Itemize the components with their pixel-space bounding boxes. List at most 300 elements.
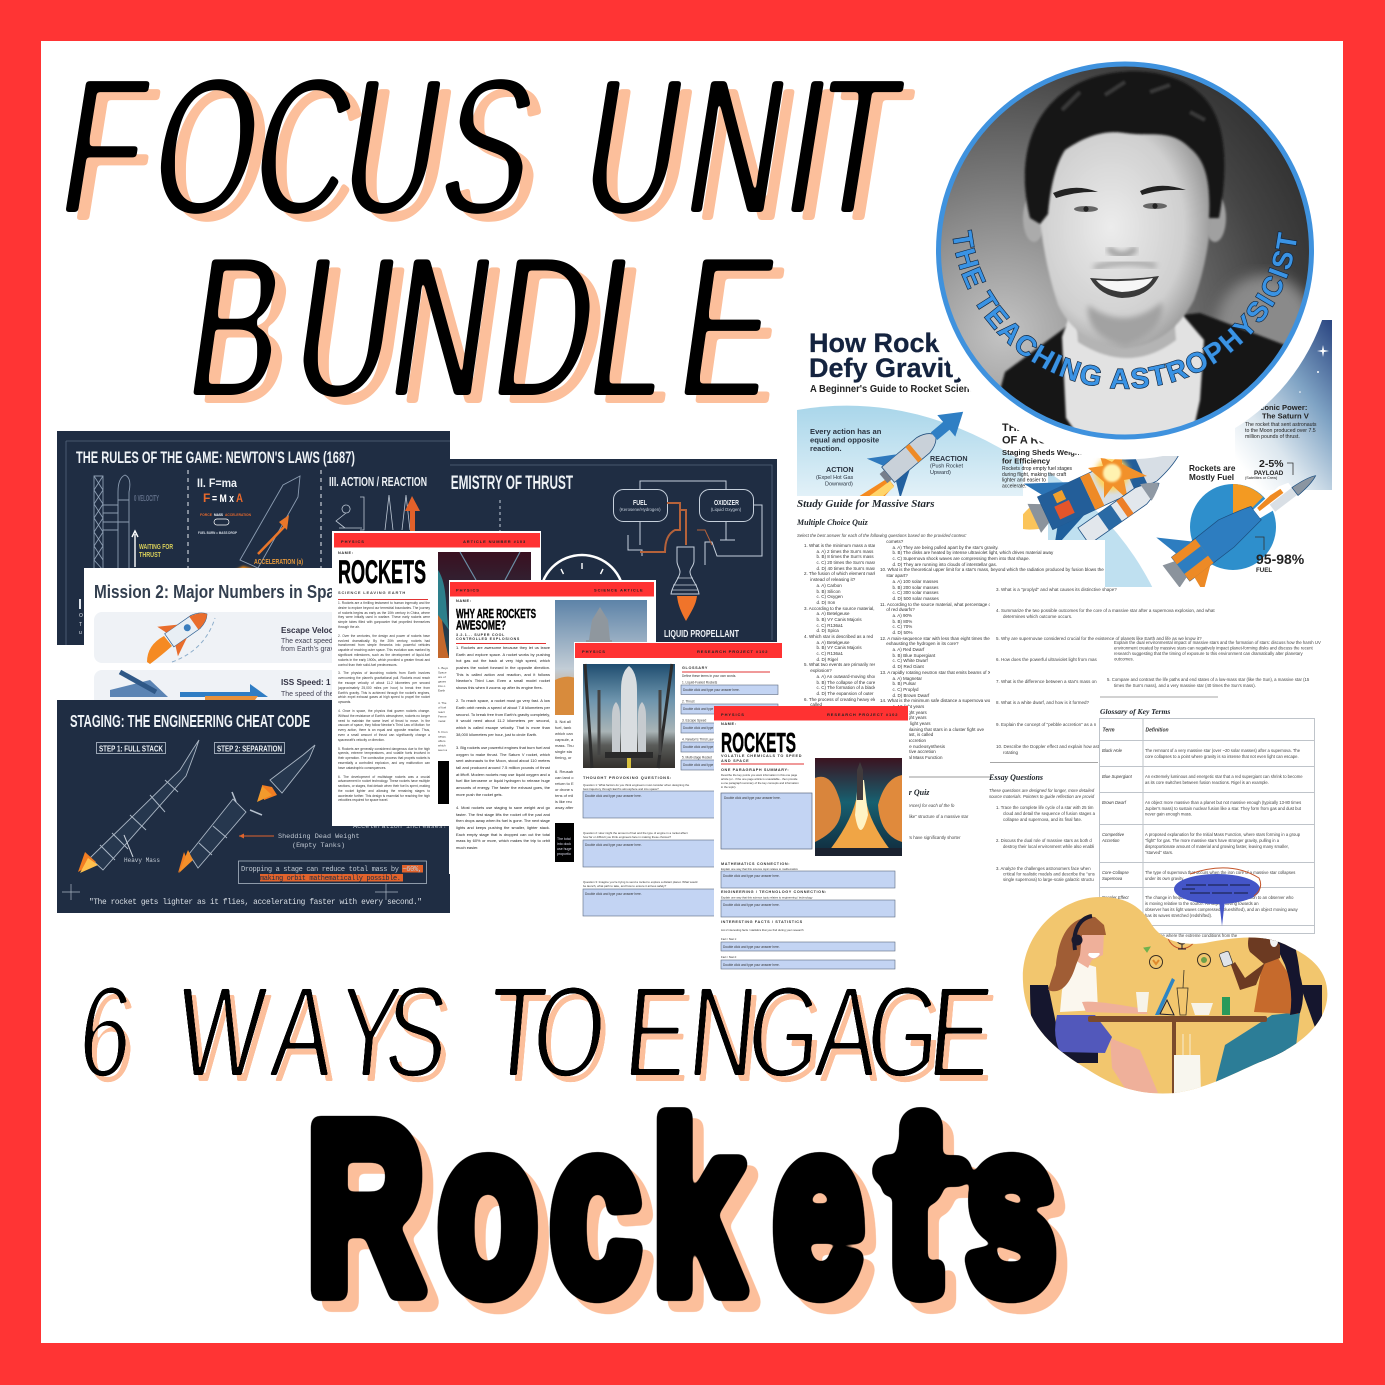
doc page: study guide quiz: Why do massive stars have significantly shorter <box>870 835 961 840</box>
thought provoking questions: be launch, what path to take, and how to ensure it arrives safely? <box>583 884 667 888</box>
fuel pie chart: Rockets are <box>1189 464 1236 473</box>
waiting for thrust: THRUST <box>139 550 161 559</box>
side text: gases <box>438 680 447 684</box>
side text: away after <box>555 805 574 810</box>
side text: Earth <box>438 688 446 692</box>
heavy mass label <box>124 835 160 864</box>
glossary answer boxes: 4. Newton's Third Law <box>682 738 714 742</box>
full stack rocket <box>78 740 199 873</box>
law two: FUEL BURN = MASS DROP <box>198 531 237 535</box>
waiting for thrust <box>132 531 173 567</box>
black fact box <box>555 823 575 862</box>
portrait photo <box>935 60 1315 445</box>
action-reaction text <box>810 427 968 488</box>
glossary answer boxes: Double click and type your answer here. <box>683 707 740 711</box>
oxidizer tank <box>700 490 754 522</box>
fuel tank: (Kerosene/Hydrogen) <box>619 507 661 512</box>
glass vase <box>1177 970 1188 1015</box>
side text: 5. Not all <box>555 719 571 724</box>
worksheet page: rockets research project <box>714 706 909 971</box>
thought provoking questions: Double click and type your answer here. <box>585 843 642 847</box>
article text: 5. Rockets are generally considered dangerous due to the high speeds, extreme temperatures, and volatile fuels involved in their operation. The combustion process that propels rockets is essentially a controlled explosion, and any malfunction can have catastrophic consequences. <box>338 747 430 770</box>
fuel labels: FUEL <box>1256 567 1272 574</box>
staging rockets <box>1023 456 1179 540</box>
one paragraph summary: article (or - if the one page article is unavailable - then provide <box>721 777 798 781</box>
shedding label <box>239 833 360 850</box>
fuel labels: 2-5% <box>1259 458 1284 470</box>
callout: making orbit mathematically possible. <box>260 875 401 883</box>
red header: PHYSICS <box>582 649 606 654</box>
heavy mass label: Heavy Mass <box>124 857 160 864</box>
waiting for thrust: WAITING FOR <box>139 542 173 551</box>
quiz column one: 1. What is the minimum mass a star a. A) 2 times the Sun's mass b. B) 8 times the Sun's mass c. C) 20 times the Sun's mass d. D) 40 times the Sun's mass 2. The fusion of which element mark instead of releasing it? a. A) Carbon b. B) Silicon c. C) Oxygen d. D) Iron 3. According to the source material, a. A) Betelgeuse b. B) VY Canis Majoris c. C) R136a1 d. D) Spica 4. Which star is described as a red a. A) Betelgeuse b. B) VY Canis Majoris c. C) R136a1 d. D) Rigel 5. What two events are primarily res explosion? a. A) An outward-moving shoc b. B) The collapse of the core c. C) The formation of a black d. D) The expansion of outer 6. The process of creating heavy ele called <box>804 543 875 707</box>
glossary answer boxes: 2. Thrust <box>682 700 695 704</box>
side text <box>438 666 449 752</box>
subtitle <box>456 633 520 641</box>
law two: MASS <box>214 513 223 517</box>
glossary answer boxes <box>681 674 778 770</box>
subtitle: AND SPACE <box>721 759 749 763</box>
glossary table: Blue Supergiant <box>1102 774 1133 779</box>
newton slide heading: THE RULES OF THE GAME: NEWTON'S LAWS (1687) <box>76 448 355 467</box>
doc page: glossary of key terms <box>1099 640 1321 940</box>
black fact box: The total <box>557 837 571 841</box>
title: Rockets: Rockets <box>307 1075 1056 1342</box>
law two: ACCELERATION <box>225 513 251 517</box>
mission heading: Mission 2: Major Numbers in Space <box>94 582 352 602</box>
fuel labels: 95-98% <box>1256 551 1305 567</box>
glossary table: under its own gravity. <box>1145 876 1184 881</box>
law two <box>197 476 251 535</box>
saturn v text: to the Moon produced over 7.5 <box>1245 428 1316 434</box>
mathematics connection <box>721 862 895 888</box>
interesting facts: INTERESTING FACTS / STATISTICS <box>721 920 803 924</box>
title <box>456 606 536 632</box>
glossary table: Brown Dwarf <box>1102 800 1127 805</box>
law three: III. ACTION / REACTION <box>329 475 427 489</box>
separated upper stage <box>257 745 315 802</box>
red header <box>714 706 908 720</box>
staging text: Staging Sheds Weight <box>1002 448 1082 457</box>
right chair <box>1257 985 1323 1062</box>
doc page: short answers and essay questions: 9. Explain the concept of "pebble accretion" as a n <box>996 722 1097 727</box>
doc page: short answers and essay questions: cloud and detail the sequence of fusion stages a <box>1003 811 1096 816</box>
microphone icon <box>1168 920 1196 949</box>
one paragraph summary: a one paragraph summary of the key concepts and information <box>721 781 799 785</box>
worksheet page: research project 102 <box>574 642 783 922</box>
doc page: short answers and essay questions: 7. What is the difference between a star's mass on <box>996 679 1097 684</box>
left woman <box>1048 916 1158 1093</box>
engineering connection <box>721 890 895 917</box>
doc page: short answers and essay questions: 2. Discuss the dual role of massive stars as both d <box>996 838 1092 843</box>
glossary table: Jupiter's mass) to sustain nuclear fusion like a star. They form from gas and dust but <box>1145 806 1302 811</box>
article text: 3. The physics of launching rockets from Earth involves overcoming the planet's gravitational pull. Rockets must reach the escape velocity of about 11.2 kilometers per second (approximately 25,000 miles per hour) to break free from Earth's gravity. This is achieved through the rocket's engines, which expel exhaust gases at high speed to propel the rocket upwards. <box>338 671 430 704</box>
glossary answer boxes: Double click and type your answer here. <box>683 688 740 692</box>
doc page: short answers and essay questions <box>988 587 1220 901</box>
side text: into o <box>438 684 446 688</box>
heading: 6 ways to engage: 6WAYSTOENGAGE <box>74 959 998 1106</box>
thought provoking questions: Double click and type your answer here. <box>585 794 642 798</box>
subtitle: CONTROLLED EXPLOSIONS <box>456 637 520 641</box>
step 2 label <box>214 742 284 754</box>
glossary heading: GLOSSARY <box>682 666 708 670</box>
hidden left text: u <box>79 630 82 636</box>
glossary table: An extremely luminous and energetic star that a red supergiant can shrink to become <box>1145 774 1303 779</box>
doc page: glossary of key terms: 5. Compare and contrast the life paths and end states of a low-mass star (like the Sun), a massive star (15 <box>1107 677 1310 682</box>
coffee cup <box>1136 992 1149 1012</box>
portrait: the teaching astrophysicist badge <box>935 62 1322 460</box>
shedding label: Shedding Dead Weight <box>278 833 360 841</box>
slide: staging cheat code <box>57 700 450 913</box>
doc page: short answers and essay questions: destroy their local environment while also enabli <box>1003 844 1094 849</box>
rockets title: ROCKETS <box>721 727 796 758</box>
article text: 1. Rockets are awesome because they let us leave Earth and explore space. A rocket works by pushing hot gas out the back at very high speed, which pushes the rocket forward in the opposite direction. This is called action and reaction, and it follows Newton's Third Law. Even a small model rocket shows this when it zooms up after its engine fires. <box>456 645 550 690</box>
black fact box: use huge <box>557 847 571 851</box>
launch illustration <box>815 758 902 856</box>
title: BUNDLE: BUNDLE <box>176 213 788 440</box>
red header: PHYSICS <box>721 712 745 717</box>
card: escape velocity: Escape Velocity <box>281 626 343 635</box>
card: ISS speed <box>94 670 332 700</box>
side text: 6. Fron <box>438 730 448 734</box>
short answer section <box>908 776 990 778</box>
glossary answer boxes: 5. Multi-stage Rocket <box>682 756 712 760</box>
glossary table: observer has its light waves compressed (blueshifted), and an object moving away <box>1145 907 1299 912</box>
glossary table: core collapses to a point where gravity is so intense that not even light can escape. <box>1145 754 1299 759</box>
glossary table: "fight" for gas. The more massive stars have stronger gravity, pulling in a <box>1145 838 1280 843</box>
article text <box>456 645 550 855</box>
shopping bag <box>1174 1034 1201 1094</box>
bowl <box>1191 1003 1213 1015</box>
one paragraph summary: Describe the key points you want information in this one page <box>721 773 798 777</box>
rocket A <box>1023 456 1179 540</box>
side text: offers <box>438 739 446 743</box>
hidden left text: O <box>79 613 83 619</box>
law two: = M x <box>212 493 235 505</box>
article text <box>338 601 430 807</box>
quiz column two: comets? a. A) They are being pulled apart by the star's gravity. b. B) The disks are heated by intense ultraviolet light, which drives material away c. C) Supernova shock waves are compressing them into that shape. d. D) They are running into clouds of interstellar gas. 10. What is the theoretical upper limit for a star's mass, beyond which the radiation produced by fusion blows the star apart? a. A) 100 solar masses b. B) 200 solar masses c. C) 300 solar masses d. D) 500 solar masses 11. According to the source material, what percentage of all of red dwarfs? a. A) 90% b. B) 80% c. C) 70% d. D) 50% 12. A main-sequence star with less than eight times the exhausting the hydrogen in its core? a. A) Red Dwarf b. B) Blue Supergiant c. C) White Dwarf d. D) Red Giant 13. A rapidly rotating neutron star that emits beams of X a. A) Magnetar b. B) Pulsar c. C) Proplyd d. D) Brown Dwarf 14. What is the minimum safe distance a supernova wo a. 10 light years b. 100 light years c. 500 light years d. 5,000 light years 15. Theory explaining that stars in a cluster fight ove massively fast, is called Pebble accretion Explosive nucleosynthesis Competitive accretion The Initial Mass Function <box>880 539 1104 760</box>
side text <box>555 719 574 810</box>
one paragraph summary: in the topic). <box>721 785 736 789</box>
engineering connection: Double click and type your answer here. <box>723 903 780 907</box>
infographic: How Rockets Defy Gravity <box>797 320 1332 587</box>
doc page: glossary of key terms: research suggesting that the timing of exposure to this environment can dramatically alter planetary <box>1114 651 1304 656</box>
doc page: short answers and essay questions: 3. What is a "proplyd" and what causes its distinctive shape? <box>996 587 1117 592</box>
side text: Space <box>438 670 447 674</box>
action-reaction rocket <box>860 412 964 496</box>
infographic heading: How Rockets <box>809 328 979 358</box>
doc page: short answers and essay questions: 8. What is a white dwarf, and how is it formed? <box>996 700 1090 705</box>
fuel tank: FUEL <box>633 498 647 507</box>
side text: tens of mil <box>555 793 573 798</box>
glossary table: Term <box>1102 728 1115 734</box>
doc page: study guide quiz: Describe the "onion-like" structure of a massive star <box>870 814 969 819</box>
staging text: Rockets drop empty fuel stages <box>1002 466 1073 472</box>
side text: timing, or <box>555 755 572 760</box>
doc page: short answers and essay questions: rotating <box>1003 750 1019 755</box>
doc page: short answers and essay questions: source materials. Pointers to guide reflection are provid <box>989 794 1095 799</box>
thought provoking questions: Question 1: What factors do you think engineers must consider when designing the <box>583 783 690 787</box>
infographic heading <box>810 332 971 394</box>
thought provoking questions: best trajectory through Earth's atmosphere and into space? <box>583 787 659 791</box>
subtitle: 3.2.1... SUPER COOL <box>456 633 505 637</box>
glossary answer boxes: Double click and type your answer here. <box>683 763 740 767</box>
fuel pie chart <box>1189 464 1276 570</box>
doc page: glossary of key terms: Explain the dual environmental impact of massive stars and the formation of stars: discuss how the harsh UV <box>1114 640 1321 645</box>
glossary table <box>1099 718 1315 938</box>
name: NAME: <box>338 551 353 555</box>
glossary table: Accretion <box>1101 838 1120 843</box>
glossary answer boxes: Double click and type your answer here. <box>683 745 740 749</box>
doc page: short answers and essay questions: single supernova) to large-scale galactic structu <box>1003 877 1094 882</box>
article image <box>555 600 647 715</box>
fuel tank <box>614 490 668 522</box>
side text: mass. Thu <box>555 743 574 748</box>
doc page: short answers and essay questions: 5. Why are supernovae considered crucial for the existence of planets like Earth and life as we know it? <box>996 636 1202 641</box>
action-reaction text: REACTION <box>930 454 968 463</box>
side text: 6. Reusab <box>555 769 574 774</box>
fuel labels <box>1245 458 1305 574</box>
infographic sky corner <box>1235 320 1332 490</box>
article text: 2. Over the centuries, the design and power of rockets have evolved dramatically. By the 20th century, rockets had transformed from simple fireworks into powerful vehicles capable of reaching outer space. This evolution was marked by significant milestones, such as the development of liquid-fuel rockets in the early 1900s, which provided a greater thrust and control than their solid-fuel predecessors. <box>338 634 430 667</box>
mathematics connection: MATHEMATICS CONNECTION: <box>721 862 790 866</box>
action-reaction text: Upward) <box>930 470 951 476</box>
red header: SCIENCE ARTICLE <box>594 588 644 592</box>
side text: react <box>438 710 445 714</box>
worksheet page: why are rockets awesome <box>449 580 656 874</box>
engineering connection: ENGINEERING / TECHNOLOGY CONNECTION: <box>721 890 827 894</box>
action-reaction text: Every action has an <box>810 427 882 436</box>
side text: 4. The <box>438 701 447 705</box>
side text: can land o <box>555 775 574 780</box>
doc page: study guide quiz: Short Answer Quiz <box>867 788 930 797</box>
mathematics connection: Explain one way that this science topic relates to mathematics <box>721 867 798 871</box>
saturn v text: Iconic Power: <box>1258 403 1307 412</box>
action-reaction text: equal and opposite <box>810 436 879 444</box>
yellow blob background <box>1023 897 1327 1094</box>
article text: 3. Big rockets use powerful engines that burn fuel and oxygen to make thrust. The Saturn V rocket, which sent astronauts to the Moon, stood about 110 meters tall and produced around 7.5 million pounds of thrust at liftoff. Modern rockets may use liquid oxygen and a fuel like kerosene or liquid hydrogen to release huge amounts of energy. The faster the exhaust goes, the more push the rocket gets. <box>456 745 550 796</box>
glossary answer boxes: 3. Escape Speed <box>682 718 707 722</box>
infographic heading: A Beginner's Guide to Rocket Science <box>810 383 980 395</box>
rocket photo <box>583 664 675 768</box>
subtitle <box>721 754 802 763</box>
subtitle: VOLATILE CHEMICALS TO SPEED <box>721 754 802 758</box>
action-reaction text: Downward) <box>825 482 853 488</box>
fuel rocket <box>1156 475 1316 587</box>
slide: mission 2 major numbers <box>84 568 332 700</box>
staging text: accelerate. <box>1002 483 1026 489</box>
side text: metal <box>438 719 446 723</box>
law two: F <box>203 491 210 505</box>
doc page: short answers and essay questions: 4. Summarize the two possible outcomes for the core of a massive star after a supernova explosion, and what <box>996 608 1215 613</box>
doc page: short answers and essay questions: Essay Questions <box>988 773 1043 782</box>
side text: single sta <box>555 749 573 754</box>
callout <box>238 861 426 884</box>
action-reaction text: ACTION <box>826 465 854 474</box>
article image <box>438 552 531 658</box>
oxidizer tank: (Liquid Oxygen) <box>711 507 742 512</box>
name: NAME: <box>456 599 471 603</box>
multiple choice heading: Multiple Choice Quiz <box>796 518 869 527</box>
one paragraph summary: ONE PARAGRAPH SUMMARY: <box>721 768 789 772</box>
fuel labels: (Satellites or Crew) <box>1245 476 1278 480</box>
speech bubble <box>1174 868 1261 926</box>
curved name text <box>952 215 1298 388</box>
hidden left text <box>79 599 83 636</box>
side text: capsule, a <box>555 737 574 742</box>
article text: 2. To reach space, a rocket must go very fast. A low Earth orbit needs a speed of about 7.8 kilometers per second. To break free from Earth's gravity completely, it would need about 11.2 kilometers per second, which is called escape velocity. That is more than 38,000 kilometers per hour, just to circle Earth. <box>456 698 550 736</box>
black fact box: proportio <box>557 852 571 856</box>
saturn v text: million pounds of thrust. <box>1245 434 1300 440</box>
fuel labels: PAYLOAD <box>1254 470 1284 477</box>
doc page: glossary of key terms: Glossary of Key Terms <box>1100 707 1170 716</box>
action-reaction text: reaction. <box>810 444 842 453</box>
staging text: OF A ROCKET <box>1002 434 1077 446</box>
red header: PHYSICS <box>341 539 365 544</box>
glossary table: Definition <box>1146 728 1169 734</box>
rocket B <box>1077 482 1160 540</box>
law two: A <box>236 491 243 505</box>
engine flame <box>677 596 697 621</box>
step 2 label: STEP 2: SEPARATION <box>217 744 282 754</box>
side text: which <box>438 744 446 748</box>
blue wave <box>797 406 1023 496</box>
staging text <box>1002 422 1082 489</box>
glossary answer boxes: Double click and type your answer here. <box>683 726 740 730</box>
red header: ARTICLE NUMBER #103 <box>463 539 526 544</box>
interesting facts: Fact / Stat 1: <box>721 937 737 941</box>
accelerating rocket: ACCELERATION (a) <box>254 559 303 566</box>
interesting facts: Double click and type your answer here. <box>723 945 780 949</box>
glossary table: never gain enough mass. <box>1145 812 1192 816</box>
step 1 label <box>96 742 166 754</box>
engineering connection: Explain one way that this science topic relates to engineering / technology <box>721 896 813 900</box>
black fact box <box>438 761 450 804</box>
card: escape velocity: from Earth's gravity <box>281 646 342 653</box>
quote: "The rocket gets lighter as it flies, accelerating faster with every second." <box>89 899 422 907</box>
saturn v text: The rocket that sent astronauts <box>1245 422 1317 428</box>
side text: or drone s <box>555 787 573 792</box>
glossary table: An object more massive than a planet but not massive enough (typically 13-80 times <box>1145 800 1301 805</box>
glossary table: as its core switches between fusion reactions. Rigel is an example. <box>1145 780 1269 785</box>
black fact box: into dock <box>557 842 571 846</box>
staging text: lighter and easier to <box>1002 478 1046 484</box>
velocity label: 0 VELOCITY <box>134 494 159 503</box>
callout: Dropping a stage can reduce total mass by ~60%, <box>241 866 422 874</box>
right woman <box>1213 913 1303 1093</box>
doc page: short answers and essay questions: 6. How does the powerful ultraviolet light from mas <box>996 657 1098 662</box>
card: escape velocity: The exact speed <box>281 638 333 645</box>
glossary answer boxes: Define these terms in your own words. <box>682 674 736 678</box>
title: FOCUS UNIT: FOCUSUNIT <box>48 37 914 256</box>
action-reaction text: (Push Rocket <box>930 464 963 470</box>
propellant pipes <box>628 481 762 565</box>
action-reaction text: (Expel Hot Gas <box>816 475 854 481</box>
article text: 6. The development of multistage rockets was a crucial advancement in rocket technology. These rockets have multiple sections, or stages, that detach when their fuel is spent, making the rocket lighter and allowing the remaining stages to accelerate further. This design is essential for reaching the high velocities required for space travel. <box>338 774 430 802</box>
thought provoking questions: THOUGHT PROVOKING QUESTIONS: <box>583 775 672 780</box>
planet arc <box>1048 472 1152 587</box>
doc page: short answers and essay questions: 3. Analyze the challenges astronomers face when <box>996 866 1091 871</box>
side text: are of <box>438 675 446 679</box>
glossary table: Doppler Effect <box>1102 895 1129 900</box>
glossary table: "starved" stars. <box>1145 850 1173 855</box>
doc page: glossary of key terms: outcomes. <box>1114 656 1134 662</box>
title: WHY ARE ROCKETS <box>456 606 536 621</box>
saturn v text <box>1245 403 1317 440</box>
glossary table: The phase where the extreme conditions from the <box>1145 933 1238 938</box>
portrait: the teaching astrophysicist badge: THE TEACHING ASTROPHYSICIST <box>952 230 1298 390</box>
doc page: glossary of key terms: environment created by massive stars can negatively impact planet-forming disks and discuss the recent <box>1114 646 1314 650</box>
glossary table: Core-Collapse <box>1102 870 1129 875</box>
step 1 label: STEP 1: FULL STACK <box>99 744 164 754</box>
engine nozzle <box>671 547 699 594</box>
side text: cargo, <box>438 734 447 738</box>
launch tower and rocket <box>94 475 130 570</box>
liquid propellant label: LIQUID PROPELLANT <box>664 628 739 640</box>
doc page: short answers and essay questions: determines which outcome occurs. <box>1003 614 1072 619</box>
staging text: during flight, making the craft <box>1002 472 1067 478</box>
glossary table: A proposed explanation for the Initial Mass Function, where stars forming in a group <box>1145 832 1301 837</box>
interesting facts: Double click and type your answer here. <box>723 963 780 967</box>
glossary table: is moving relative to the source. An object moving towards an <box>1145 901 1259 906</box>
staging heading: STAGING: THE ENGINEERING CHEAT CODE <box>70 711 310 731</box>
doc page: short answers and essay questions: 10. Describe the Doppler effect and explain how astr <box>996 744 1101 749</box>
oxidizer tank: OXIDIZER <box>714 498 739 507</box>
chemistry heading: THE CHEMISTRY OF THRUST <box>407 472 573 494</box>
glossary table: Black Hole <box>1102 748 1123 753</box>
shedding label: (Empty Tanks) <box>292 842 345 850</box>
hidden left text: T <box>79 622 82 628</box>
glossary table: The remnant of a very massive star (over ~20 solar masses) after a supernova. The <box>1145 748 1301 753</box>
name: NAME: <box>721 722 736 726</box>
fuel pie chart: Mostly Fuel <box>1189 473 1234 482</box>
staging text: for Efficiency <box>1002 456 1051 466</box>
side text: 1. Beyo <box>438 666 449 670</box>
study guide heading: Study Guide for Massive Stars <box>797 498 935 510</box>
red header: RESEARCH PROJECT #102 <box>697 649 768 654</box>
glossary table: Supernova <box>1102 876 1123 881</box>
article text: 4. Once in space, the physics that govern rockets change. Without the resistance of Earth's atmosphere, rockets no longer need to maintain the same level of thrust to move. In the vacuum of space, they follow Newton's Third Law of Motion: for every action, there is an equal and opposite reaction. Thus, even a small amount of thrust can significantly change a spacecraft's velocity or direction. <box>338 709 430 742</box>
saturn v text: The Saturn V <box>1262 412 1310 420</box>
one paragraph summary <box>721 768 812 849</box>
one paragraph summary: Double click and type your answer here. <box>724 796 781 800</box>
separated lower stage <box>178 792 262 873</box>
blue ring <box>938 64 1312 437</box>
doc page: short answers and essay questions: collapse and supernova, and its final fate. <box>1003 817 1082 822</box>
subtitle: SCIENCE LEAVING EARTH <box>338 590 406 595</box>
doc page: study guide quiz: Provide a short answer (2-3 sentences) for each of the fo <box>846 803 955 808</box>
glossary heading <box>682 666 770 672</box>
doc page: short answers and essay questions: critical for realistic models and describe the "uns <box>1003 872 1095 876</box>
separation burst <box>1088 458 1147 498</box>
heart and leaf icons <box>1144 947 1210 968</box>
rockets title: ROCKETS <box>338 554 426 590</box>
side text: of fuel <box>438 706 447 710</box>
thought provoking questions: Question 2: How might the amount of fuel and the type of engine in a rocket affect <box>583 831 688 835</box>
slide: chemistry of thrust <box>450 459 777 642</box>
red header: PHYSICS <box>456 588 480 592</box>
side text: Ferme <box>438 714 447 718</box>
red header <box>334 533 540 548</box>
infographic heading: Defy Gravity <box>809 353 968 383</box>
side text: fuel, tank <box>555 725 571 730</box>
red header: RESEARCH PROJECT #102 <box>827 712 898 717</box>
acceleration increases label: Acceleration increases! <box>353 823 447 831</box>
study guide documents <box>796 496 1321 940</box>
green can <box>1222 997 1230 1015</box>
law three <box>330 476 426 531</box>
side text: return to E <box>555 781 574 786</box>
